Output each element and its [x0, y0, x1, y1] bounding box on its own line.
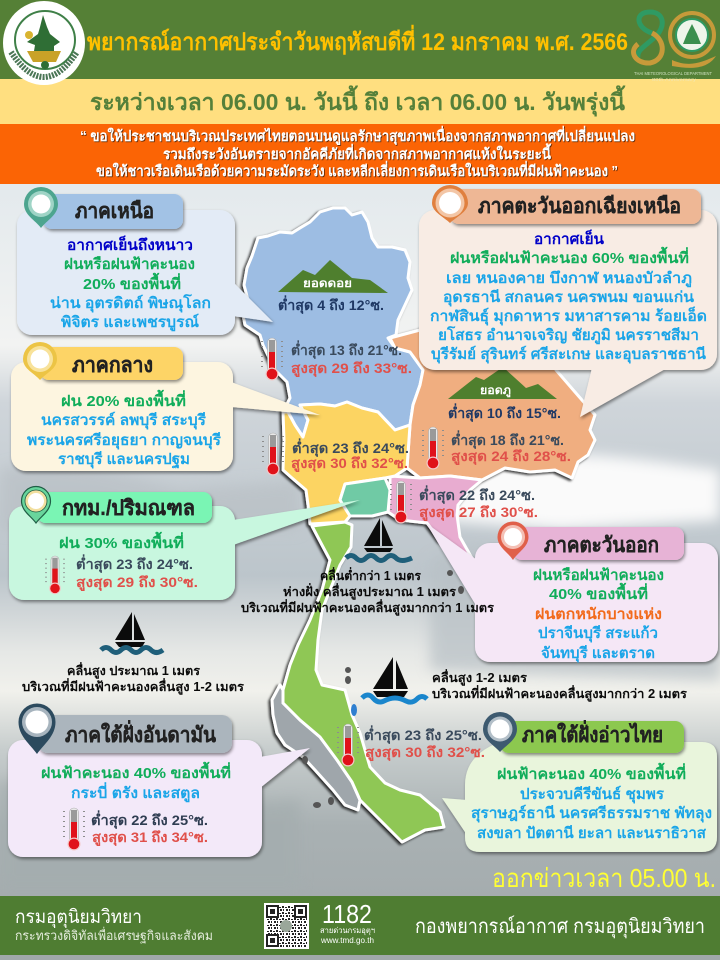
icon: boat andaman: [101, 612, 163, 652]
wave text: andaman: [22, 662, 244, 695]
mountain: Phu peak (northeast): ยอดภู: [480, 385, 511, 398]
panel: south andaman coast: กระบี่ ตรัง และสตูล: [71, 782, 200, 803]
wave text: andaman: คลื่นสูง ประมาณ 1 เมตร: [67, 662, 200, 679]
panel: north: พิจิตร และเพชรบูรณ์: [61, 313, 199, 332]
panel: south gulf coast: ฝนฟ้าคะนอง 40% ของพื้นที่: [497, 762, 686, 783]
panel: east: [426, 522, 718, 663]
footer: hotline: สายด่วนกรมอุตุฯ: [320, 926, 375, 935]
panel: northeast: อุดรธานี สกลนคร นครพนม ขอนแก่น: [443, 289, 695, 307]
wave text: upper gulf: ห่างฝั่ง คลื่นสูงประมาณ 1 เมตร: [283, 583, 456, 600]
panel: north: [17, 187, 273, 335]
date range band: ระหว่างเวลา 06.00 น. วันนี้ ถึง เวลา 06.00 น. วันพรุ่งนี้: [90, 85, 626, 117]
wave text: andaman: บริเวณที่มีฝนฟ้าคะนองคลื่นสูง 1-2 เมตร: [22, 678, 244, 695]
temperature: east: ต่ำสุด 22 ถึง 24°ซ.: [419, 485, 535, 504]
panel: east: ฝนหรือฝนฟ้าคะนอง: [533, 567, 664, 584]
map region: east: [388, 476, 482, 560]
panel: central: ภาคกลาง: [72, 354, 153, 377]
panel: bangkok and vicinity: ต่ำสุด 23 ถึง 24°ซ.: [76, 554, 193, 573]
panel: south andaman coast: สูงสุด 31 ถึง 34°ซ.: [92, 829, 208, 846]
footer: hotline: 1182: [322, 899, 372, 929]
panel: bangkok and vicinity: ฝน 30% ของพื้นที่: [59, 531, 184, 552]
mountain: Doi peak (north): ยอดดอย: [303, 278, 352, 290]
temperature: south gulf: ต่ำสุด 23 ถึง 25°ซ.: [364, 725, 482, 744]
panel: northeast: ฝนหรือฝนฟ้าคะนอง 60% ของพื้นที่: [450, 246, 689, 267]
wave text: upper gulf: คลื่นต่ำกว่า 1 เมตร: [320, 567, 421, 583]
map of Thailand: [243, 208, 595, 842]
panel: south andaman coast: ภาคใต้ฝั่งอันดามัน: [65, 719, 217, 747]
panel: north: อากาศเย็นถึงหนาว: [67, 235, 193, 254]
panel: northeast: ภาคตะวันออกเฉียงเหนือ: [478, 194, 681, 218]
wave text: lower gulf: คลื่นสูง 1-2 เมตร: [432, 669, 527, 686]
panel: south gulf coast: ประจวบคีรีขันธ์ ชุมพร: [520, 785, 665, 804]
mountain: Phu peak (northeast): [448, 367, 557, 399]
header title: พยากรณ์อากาศประจำวันพฤหัสบดีที่ 12 มกราคม พ.ศ. 2566: [87, 24, 628, 56]
temperature: south gulf: สูงสุด 30 ถึง 32°ซ.: [365, 744, 485, 761]
header band: [0, 0, 720, 79]
islands: [302, 570, 464, 808]
map region: bangkok: [340, 478, 390, 516]
panel: south andaman coast: ฝนฟ้าคะนอง 40% ของพื้นที่: [41, 761, 231, 782]
icon: gulf pin: [483, 712, 517, 752]
panel: north: ภาคเหนือ: [75, 199, 154, 223]
80th anniversary logo: 80th Anniversary: [652, 77, 697, 82]
panel: northeast: เลย หนองคาย บึงกาฬ หนองบัวลำภู: [446, 269, 692, 288]
temperature: east: สูงสุด 27 ถึง 30°ซ.: [419, 504, 538, 521]
panel: east: ฝนตกหนักบางแห่ง: [535, 606, 662, 623]
panel: bangkok and vicinity: [9, 486, 360, 600]
icon: andaman pin: [18, 704, 56, 754]
panel: bangkok and vicinity: กทม./ปริมณฑล: [62, 497, 195, 520]
map region: south gulf coast: [283, 522, 444, 842]
panel: bangkok and vicinity: สูงสุด 29 ถึง 30°ซ.: [76, 574, 198, 591]
panel: north: น่าน อุตรดิตถ์ พิษณุโลก: [50, 293, 211, 313]
panel: central: ราชบุรี และนครปฐม: [58, 451, 190, 469]
temperature: central: สูงสุด 30 ถึง 32°ซ.: [291, 455, 408, 472]
panel: south gulf coast: สงขลา ปัตตานี ยะลา และนราธิวาส: [477, 824, 707, 842]
80th anniversary logo: [634, 12, 716, 82]
temperature: east: [390, 481, 538, 524]
date range band: [0, 79, 720, 124]
warning band: “ ขอให้ประชาชนบริเวณประเทศไทยตอนบนดูแลรักษาสุขภาพเนื่องจากสภาพอากาศที่เปลี่ยนแปลง: [80, 125, 635, 145]
panel: northeast: [419, 185, 717, 417]
warning band: ขอให้ชาวเรือเดินเรือด้วยความระมัดระวัง และหลีกเลี่ยงการเดินเรือในบริเวณที่มีฝนฟ้าคะนอง ”: [96, 160, 618, 180]
mountain: Doi peak (north): [278, 260, 388, 293]
map region: northeast: [390, 300, 595, 480]
panel: east: จันทบุรี และตราด: [541, 645, 655, 663]
map region: central: [283, 402, 410, 524]
panel: south gulf coast: [442, 712, 717, 852]
wave text: lower gulf: บริเวณที่มีฝนฟ้าคะนองคลื่นสูงมากกว่า 2 เมตร: [432, 685, 687, 702]
temperature: northeast: [422, 427, 571, 470]
warning band: [0, 124, 720, 184]
panel: south gulf coast: สุราษฎร์ธานี นครศรีธรรมราช พัทลุง: [471, 804, 712, 823]
map region: north: [243, 208, 423, 437]
panel: central: [11, 342, 320, 471]
panel: east: ภาคตะวันออก: [544, 534, 659, 557]
footer: department name: [15, 907, 213, 944]
icon: northeast pin: [432, 185, 468, 223]
panel: east: ปราจีนบุรี สระแก้ว: [538, 625, 658, 643]
temperature: northeast: ต่ำสุด 18 ถึง 21°ซ.: [451, 430, 564, 449]
panel: north: ฝนหรือฝนฟ้าคะนอง: [64, 256, 195, 273]
temperature: northeast peak: ต่ำสุด 10 ถึง 15°ซ.: [448, 403, 561, 422]
panel: northeast: กาฬสินธุ์ มุกดาหาร มหาสารคาม ร้อยเอ็ด: [430, 306, 707, 326]
icon: boat lower gulf: [362, 657, 427, 702]
footer band: [0, 896, 720, 955]
wave text: upper gulf: บริเวณที่มีฝนฟ้าคะนองคลื่นสูงมากกว่า 1 เมตร: [241, 599, 494, 616]
ministry logo: [3, 1, 85, 85]
panel: south andaman coast: ต่ำสุด 22 ถึง 25°ซ.: [91, 810, 208, 829]
footer: hotline: [320, 899, 375, 945]
footer: department name: กรมอุตุนิยมวิทยา: [15, 907, 142, 929]
icon: central pin: [23, 342, 57, 380]
wave text: lower gulf: [432, 669, 687, 702]
footer: hotline: www.tmd.go.th: [320, 936, 374, 945]
80th anniversary logo: THAI METEOROLOGICAL DEPARTMENT: [634, 71, 712, 76]
panel: central: พระนครศรีอยุธยา กาญจนบุรี: [27, 432, 222, 450]
warning band: รวมถึงระวังอันตรายจากอัคคีภัยที่เกิดจากสภาพอากาศแห้งในระยะนี้: [163, 143, 551, 163]
icon: north pin: [24, 187, 58, 228]
panel: south andaman coast: [8, 704, 310, 857]
wave text: upper gulf: [241, 567, 494, 616]
icon: east pin: [498, 522, 528, 560]
icon: bangkok pin: [22, 486, 50, 523]
panel: south gulf coast: ภาคใต้ฝั่งอ่าวไทย: [522, 719, 663, 747]
footer: department name: กระทรวงดิจิทัลเพื่อเศรษฐกิจและสังคม: [15, 927, 213, 944]
temperature: north: สูงสุด 29 ถึง 33°ซ.: [291, 360, 412, 377]
panel: north: 20% ของพื้นที่: [83, 272, 181, 293]
panel: central: ฝน 20% ของพื้นที่: [61, 389, 186, 410]
temperature: central: [262, 433, 409, 476]
temperature: north peak: ต่ำสุด 4 ถึง 12°ซ.: [278, 295, 384, 314]
icon: QR code: [264, 903, 309, 949]
panel: east: 40% ของพื้นที่: [549, 582, 648, 603]
temperature: central: ต่ำสุด 23 ถึง 24°ซ.: [292, 438, 409, 457]
panel: northeast: บุรีรัมย์ สุรินทร์ ศรีสะเกษ และอุบลราชธานี: [431, 345, 707, 364]
temperature: north: [261, 338, 412, 380]
icon: boat upper gulf: [346, 518, 412, 560]
panel: northeast: ยโสธร อำนาจเจริญ ชัยภูมิ นครราชสีมา: [438, 325, 699, 345]
temperature: north: ต่ำสุด 13 ถึง 21°ซ.: [291, 340, 402, 359]
panel: central: นครสวรรค์ ลพบุรี สระบุรี: [41, 411, 207, 430]
temperature: northeast: สูงสุด 24 ถึง 28°ซ.: [451, 448, 571, 465]
temperature: south gulf: [337, 724, 485, 766]
map region: andaman coast: [272, 685, 360, 810]
panel: northeast: อากาศเย็น: [534, 229, 605, 248]
